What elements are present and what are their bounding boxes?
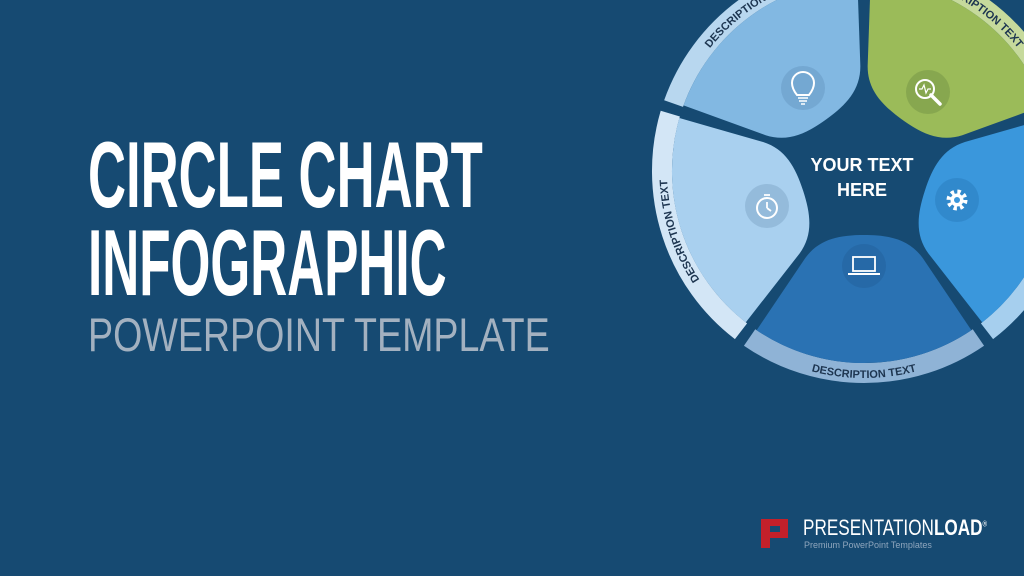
- segment: top-left: [653, 0, 919, 186]
- segment: bottom: [750, 235, 978, 373]
- icon: gear: [935, 178, 979, 222]
- ring labels: [660, 0, 1024, 378]
- center text: YOUR TEXT: [810, 155, 914, 175]
- icon: laptop: [842, 244, 886, 288]
- subtitle: POWERPOINT TEMPLATE: [88, 308, 550, 361]
- segment: left: [637, 82, 838, 342]
- center text: HERE: [837, 180, 887, 200]
- center text: [810, 155, 914, 200]
- ring labels: DESCRIPTION TEXT: [812, 364, 915, 378]
- segment: right: [890, 82, 1024, 342]
- icon: bulb: [781, 66, 825, 110]
- title line 1: CIRCLE CHART: [88, 122, 483, 227]
- segment: top green: [809, 0, 1024, 186]
- icon: magnifier: [906, 70, 950, 114]
- icon: stopwatch: [745, 184, 789, 228]
- title line 2: INFOGRAPHIC: [88, 210, 447, 315]
- logo text: PRESENTATIONLOAD®: [803, 515, 987, 540]
- logo: [761, 515, 987, 550]
- logo icon: [761, 519, 788, 548]
- ring labels: DESCRIPTION TEXT: [660, 180, 700, 284]
- logo: Premium PowerPoint Templates: [804, 540, 932, 550]
